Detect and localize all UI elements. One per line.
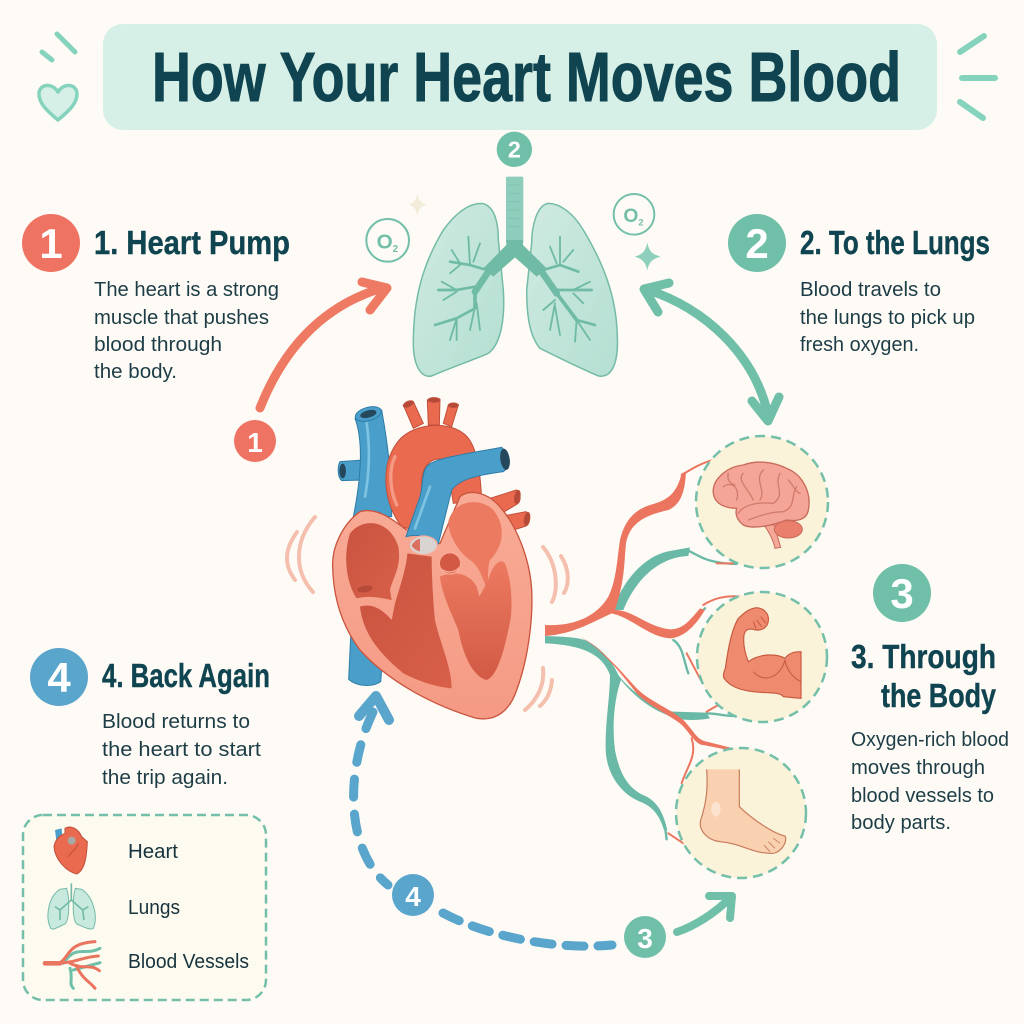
O2 labels: O	[623, 206, 638, 227]
step 3 text: 3	[890, 570, 914, 617]
legend icon: heart	[54, 827, 87, 874]
marker 1: 1	[247, 427, 263, 458]
step 3 text: Oxygen-rich blood	[851, 728, 1009, 751]
pulmonary valve	[409, 536, 437, 555]
left atrium	[448, 502, 502, 598]
pulmonary veins	[490, 490, 531, 532]
legend: Heart	[128, 840, 178, 863]
O2 badges	[366, 194, 654, 262]
superior vena cava	[338, 404, 392, 517]
step 3 text: 3. Through	[851, 638, 996, 675]
step 4 text: Blood returns to	[102, 710, 250, 733]
O2 labels: 2	[393, 244, 399, 255]
aortic valve	[439, 553, 462, 574]
title banner	[103, 24, 937, 130]
legend	[23, 815, 266, 1000]
right atrium shadow	[357, 585, 373, 593]
step 3 text: moves through	[851, 756, 985, 779]
step 2 text: Blood travels to	[800, 278, 941, 301]
trachea	[506, 177, 523, 243]
right atrium	[346, 523, 399, 600]
heart motion lines	[287, 517, 568, 710]
body vessels	[545, 459, 740, 843]
legend icon: blood vessels	[45, 942, 100, 988]
arrow: back to heart dashed	[354, 696, 612, 946]
step 1 text: muscle that pushes	[94, 306, 269, 329]
aorta arch	[386, 398, 482, 530]
teal vessels	[545, 547, 737, 839]
step 1 text: 1	[39, 220, 63, 267]
marker 4	[392, 874, 434, 916]
heart body	[333, 492, 532, 719]
body part: brain	[696, 436, 828, 568]
step 1 text	[22, 214, 290, 383]
legend: Lungs	[128, 896, 180, 919]
lungs	[366, 132, 661, 376]
step 3 text: blood vessels to	[851, 784, 994, 807]
body part: arm	[697, 592, 827, 722]
right ventricle	[360, 553, 452, 688]
step 4 text: 4. Back Again	[102, 657, 270, 694]
legend icon: lungs	[48, 883, 95, 929]
step 4 text: the heart to start	[102, 738, 261, 761]
decoration: heart and sparks top left	[39, 34, 77, 120]
arrow: lungs to body	[644, 283, 779, 421]
red vessels	[545, 459, 740, 843]
marker 3	[624, 916, 666, 958]
step 1 text: blood through	[94, 333, 222, 356]
step 4 text: the trip again.	[102, 766, 228, 789]
step 3 text	[851, 564, 1009, 834]
step 1 text: the body.	[94, 360, 177, 383]
arrow: heart to lungs	[260, 282, 387, 408]
left ventricle	[440, 561, 512, 680]
body part: foot	[676, 748, 806, 878]
sparkles	[409, 193, 661, 271]
bronchial tree	[435, 237, 595, 342]
decoration: sparks top right	[960, 36, 995, 118]
step 3 text: the Body	[881, 677, 997, 714]
step 2 text: the lungs to pick up	[800, 306, 975, 329]
step 2 text: 2	[745, 220, 769, 267]
O2 labels: O	[377, 231, 393, 254]
marker 2	[497, 132, 532, 167]
step 2 text	[728, 214, 990, 356]
step 3 text: body parts.	[851, 811, 951, 834]
step 4 text	[30, 648, 270, 789]
inferior vena cava	[349, 637, 383, 685]
step 4 text: 4	[47, 654, 71, 701]
O2 labels	[377, 206, 644, 255]
pulmonary artery	[406, 447, 509, 544]
heart	[333, 398, 532, 719]
marker 3: 3	[637, 923, 653, 954]
marker 2: 2	[508, 136, 521, 162]
marker 4: 4	[405, 881, 421, 912]
lung lobes	[413, 203, 617, 376]
marker 1	[234, 420, 276, 462]
step 2 text: fresh oxygen.	[800, 333, 919, 356]
arrow: to body	[677, 896, 732, 932]
O2 labels: 2	[638, 217, 644, 227]
step 1 text: 1. Heart Pump	[94, 224, 290, 261]
legend: Blood Vessels	[128, 950, 249, 973]
step 1 text: The heart is a strong	[94, 278, 279, 301]
